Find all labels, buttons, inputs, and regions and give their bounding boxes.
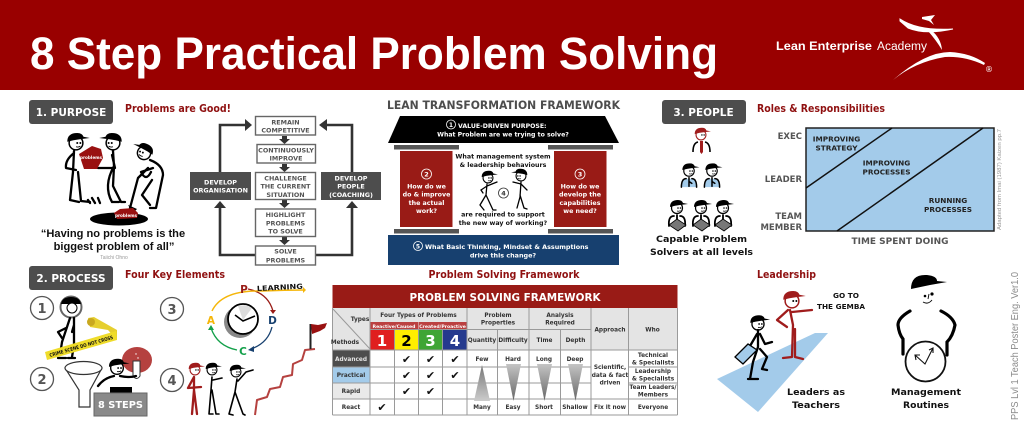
heading: roles and responsibilities: Roles & Responsibilities <box>757 103 885 115</box>
table: problem solving framework: Scientific, <box>594 365 626 371</box>
pillar: how do we do and improve: 2 <box>424 170 429 178</box>
base: basic thinking: What Basic Thinking, Mindset & Assumptions <box>425 243 589 251</box>
pillar: how do we do and improve: the actual <box>409 200 444 207</box>
badge: 3. PEOPLE <box>662 100 746 124</box>
roof: value-driven purpose: VALUE-DRIVEN PURPOSE: <box>458 123 547 130</box>
table: problem solving framework: Rapid <box>342 389 360 395</box>
illustration: people lifting problems <box>66 133 163 226</box>
table: problem solving framework: Quantity <box>468 338 496 344</box>
heading: lean transformation framework: LEAN TRANSFORMATION FRAMEWORK <box>387 98 621 112</box>
logo: Lean Enterprise Academy: ® <box>985 65 993 74</box>
centre: management system text and figures: are required to support <box>461 212 545 218</box>
base: basic thinking: drive this change? <box>470 252 536 260</box>
element 3: PDCA learning clock: P <box>240 284 248 296</box>
heading: four key elements: Four Key Elements <box>125 269 225 281</box>
callout: go to the gemba: GO TO <box>833 291 859 300</box>
table: problem solving framework: Leadership <box>635 369 671 375</box>
badge: 2. PROCESS: 2. PROCESS <box>36 273 106 285</box>
chart: time spent doing by level: IMPROVING <box>813 134 860 144</box>
caption: capable problem solvers <box>650 234 754 258</box>
heading: problem solving framework: Problem Solving Framework <box>428 269 580 281</box>
type numbers 1 to 4: 1 <box>377 332 387 350</box>
badge: 2. PROCESS <box>29 266 113 290</box>
caption: management routines: Management <box>891 388 961 398</box>
pillar: how do we do and improve: How do we <box>407 184 446 190</box>
callout: go to the gemba <box>817 291 865 311</box>
table: problem solving framework <box>331 285 678 415</box>
table: problem solving framework: Practical <box>337 373 365 379</box>
flow: problem solving cycle <box>190 116 381 265</box>
check marks: ✔ <box>402 369 411 382</box>
check marks: ✔ <box>402 353 411 366</box>
check marks: ✔ <box>402 385 411 398</box>
chart: time spent doing by level: LEADER <box>765 175 802 185</box>
element 4: team and stairs to flag: 4 <box>167 374 177 389</box>
table: problem solving framework: Methods <box>331 340 360 346</box>
house diagram <box>388 116 619 265</box>
chart: time spent doing by level: TEAM <box>775 212 802 222</box>
pillar: how do we do and improve: do & improve <box>403 192 450 198</box>
pillar: how do we develop capabilities: How do we <box>561 184 599 190</box>
element 3: PDCA learning clock <box>160 283 306 358</box>
table: problem solving framework: Short <box>535 405 553 411</box>
table: problem solving framework: Technical <box>638 353 668 359</box>
table: problem solving framework: Types <box>351 317 370 323</box>
check marks: ✔ <box>450 353 460 366</box>
table: problem solving framework: Problem <box>484 313 512 319</box>
centre: management system text and figures: 4 <box>501 190 506 198</box>
badge: 1. PURPOSE <box>29 100 113 124</box>
centre: management system text and figures: the new way of working? <box>459 220 548 227</box>
logo: Lean Enterprise Academy <box>776 15 993 80</box>
table: problem solving framework: Long <box>536 357 552 363</box>
table: problem solving framework: driven <box>600 380 620 386</box>
chart: time spent doing by level: PROCESSES <box>863 168 910 176</box>
table: problem solving framework: Depth <box>566 338 585 344</box>
pillar: how do we do and improve <box>400 151 452 227</box>
caption: management routines: Routines <box>903 401 949 411</box>
callout: go to the gemba: THE GEMBA <box>817 302 865 311</box>
box: solve problems <box>256 246 316 265</box>
element 3: PDCA learning clock: C <box>239 346 247 358</box>
table: problem solving framework: Deep <box>567 357 583 363</box>
table: problem solving framework: Required <box>545 320 575 326</box>
box: challenge the current situation: SITUATION <box>266 191 305 199</box>
box: highlight problems to solve: HIGHLIGHT <box>266 211 306 219</box>
people pyramid <box>650 128 754 258</box>
box: continuously improve <box>257 144 316 163</box>
caption: leaders as teachers: Teachers <box>792 401 840 411</box>
quote: biggest problem of all” <box>54 241 174 253</box>
box: develop people: (COACHING) <box>329 191 373 199</box>
pillar: how do we develop capabilities <box>554 151 606 227</box>
element 2: funnel and 8 steps <box>30 347 152 416</box>
badge: 3. PEOPLE: 3. PEOPLE <box>673 107 734 119</box>
box: remain competitive <box>256 116 316 135</box>
box: challenge the current situation: CHALLENGE <box>264 174 307 182</box>
box: challenge the current situation <box>256 172 316 200</box>
type numbers 1 to 4 <box>370 330 467 350</box>
table: problem solving framework: Hard <box>505 357 521 363</box>
quote: Taiichi Ohno <box>100 255 128 261</box>
roof: value-driven purpose: What Problem are we trying to solve? <box>437 132 569 138</box>
element 1: detective and crime tape <box>30 296 117 360</box>
table: problem solving framework: Advanced <box>335 357 367 363</box>
type numbers 1 to 4: 3 <box>425 332 436 350</box>
heading: leadership: Leadership <box>757 269 816 281</box>
element 1: detective and crime tape: 1 <box>37 302 47 317</box>
element 1: detective and crime tape: CRIME SCENE DO NOT CROSS <box>49 335 114 359</box>
badge: 1. PURPOSE: 1. PURPOSE <box>36 107 106 119</box>
box: develop organisation <box>190 172 251 200</box>
table: problem solving framework: Shallow <box>562 405 588 411</box>
table: problem solving framework: React <box>342 405 360 411</box>
title: 8 Step Practical Problem Solving <box>30 28 718 79</box>
box: highlight problems to solve: TO SOLVE <box>268 228 303 236</box>
rock: problems in hole: problems <box>115 213 138 218</box>
check marks: ✔ <box>426 353 435 366</box>
check marks: ✔ <box>426 385 435 398</box>
table: problem solving framework: Many <box>473 405 491 411</box>
table: problem solving framework: Created/Proactive <box>419 324 466 330</box>
table: problem solving framework: Properties <box>481 320 516 326</box>
box: develop people: DEVELOP <box>335 174 368 182</box>
box: continuously improve: IMPROVE <box>270 154 302 162</box>
element 2: funnel and 8 steps: 2 <box>37 373 47 388</box>
chart: time spent doing by level: EXEC <box>778 132 802 142</box>
element 3: PDCA learning clock: A <box>207 315 216 327</box>
centre: management system text and figures <box>455 154 551 227</box>
box: develop people: PEOPLE <box>337 182 365 190</box>
box: solve problems: SOLVE <box>274 248 297 256</box>
box: develop organisation: ORGANISATION <box>193 186 248 194</box>
logo: Lean Enterprise Academy: Lean Enterprise <box>776 41 872 53</box>
box: highlight problems to solve <box>256 209 316 236</box>
type numbers 1 to 4: 2 <box>401 332 412 350</box>
pillar: how do we develop capabilities: 3 <box>578 170 582 178</box>
table: problem solving framework: Four Types of Problems <box>380 313 457 319</box>
box: highlight problems to solve: PROBLEMS <box>266 220 306 228</box>
chart: time spent doing by level <box>760 128 1003 247</box>
check marks: ✔ <box>377 401 387 414</box>
base: basic thinking: 5 <box>416 244 420 250</box>
centre: management system text and figures: & leadership behaviours <box>460 162 547 169</box>
caption: management routines <box>891 388 961 411</box>
table: problem solving framework: & Specialists <box>632 376 675 382</box>
table: problem solving framework: Who <box>645 328 660 334</box>
caption: leaders as teachers <box>787 388 845 411</box>
caption: leaders as teachers: Leaders as <box>787 388 845 398</box>
pillar: how do we develop capabilities: develop the <box>559 192 601 198</box>
illustration: management routines <box>891 275 961 411</box>
table: problem solving framework: data & fact <box>592 373 628 379</box>
heading: Problems are Good: Problems are Good! <box>125 103 231 115</box>
pillar: how do we develop capabilities: we need? <box>563 208 597 215</box>
chart: time spent doing by level: Adapted from Imai (1987) Kaizen pp.7 <box>997 129 1003 230</box>
box: remain competitive: REMAIN <box>271 118 300 126</box>
box: 8 steps: 8 STEPS <box>98 400 143 411</box>
type numbers 1 to 4: 4 <box>450 332 460 350</box>
table banner: PROBLEM SOLVING FRAMEWORK <box>410 291 601 304</box>
quote: “Having no problems is the <box>41 228 185 240</box>
chart: time spent doing by level: RUNNING <box>929 196 967 205</box>
table: problem solving framework: Members <box>638 392 669 398</box>
table banner <box>332 285 678 308</box>
chart: time spent doing by level: MEMBER <box>760 223 802 233</box>
chart: time spent doing by level: TIME SPENT DOING <box>852 237 949 247</box>
check marks: ✔ <box>426 369 435 382</box>
element 3: PDCA learning clock: 3 <box>167 303 177 318</box>
box: develop people <box>321 172 381 200</box>
check marks <box>377 353 460 414</box>
table: problem solving framework: Difficulty <box>498 338 528 344</box>
table: problem solving framework: Time <box>537 338 553 344</box>
table: problem solving framework: Few <box>475 357 489 363</box>
check marks: ✔ <box>450 369 460 382</box>
quote <box>41 228 185 261</box>
chart: time spent doing by level: IMPROVING <box>863 158 910 168</box>
pillar: how do we develop capabilities: capabilities <box>560 200 601 207</box>
table: problem solving framework: Reactive/Caused <box>373 324 415 330</box>
table: problem solving framework: Analysis <box>546 313 574 319</box>
box: continuously improve: CONTINUOUSLY <box>258 146 314 154</box>
box: remain competitive: COMPETITIVE <box>261 126 310 134</box>
table: problem solving framework: Approach <box>594 328 626 334</box>
box: develop organisation: DEVELOP <box>204 178 237 186</box>
table: problem solving framework: Everyone <box>638 405 668 411</box>
pillar: how do we do and improve: work? <box>416 208 437 215</box>
version note: PPS Lvl 1 Teach Poster Eng. Ver1.0 <box>1010 272 1021 420</box>
header banner <box>0 0 1024 90</box>
centre: management system text and figures: What management system <box>455 154 551 160</box>
illustration: leaders as teachers <box>717 291 865 412</box>
box: challenge the current situation: THE CURRENT <box>260 182 311 190</box>
roof: value-driven purpose <box>388 116 619 143</box>
element 3: PDCA learning clock: D <box>268 315 277 327</box>
chart: time spent doing by level: STRATEGY <box>815 144 858 152</box>
roof: value-driven purpose: 1 <box>449 122 453 129</box>
gradient triangles <box>474 364 583 401</box>
table: problem solving framework: Team Leaders/ <box>629 385 677 391</box>
rock: problems held: problems <box>80 155 103 160</box>
table: problem solving framework: Fix it now <box>594 405 627 411</box>
base: basic thinking <box>388 235 619 265</box>
table: problem solving framework: Easy <box>505 405 521 411</box>
caption: capable problem solvers: Capable Problem <box>656 234 747 245</box>
element 4: team and stairs to flag <box>160 323 327 415</box>
box: solve problems: PROBLEMS <box>266 256 306 264</box>
caption: capable problem solvers: Solvers at all levels <box>650 247 754 258</box>
table: problem solving framework: & Specialists <box>632 360 675 366</box>
logo: Lean Enterprise Academy: Academy <box>877 41 927 53</box>
chart: time spent doing by level: PROCESSES <box>924 205 972 214</box>
element 3: PDCA learning clock: LEARNING <box>257 283 303 293</box>
